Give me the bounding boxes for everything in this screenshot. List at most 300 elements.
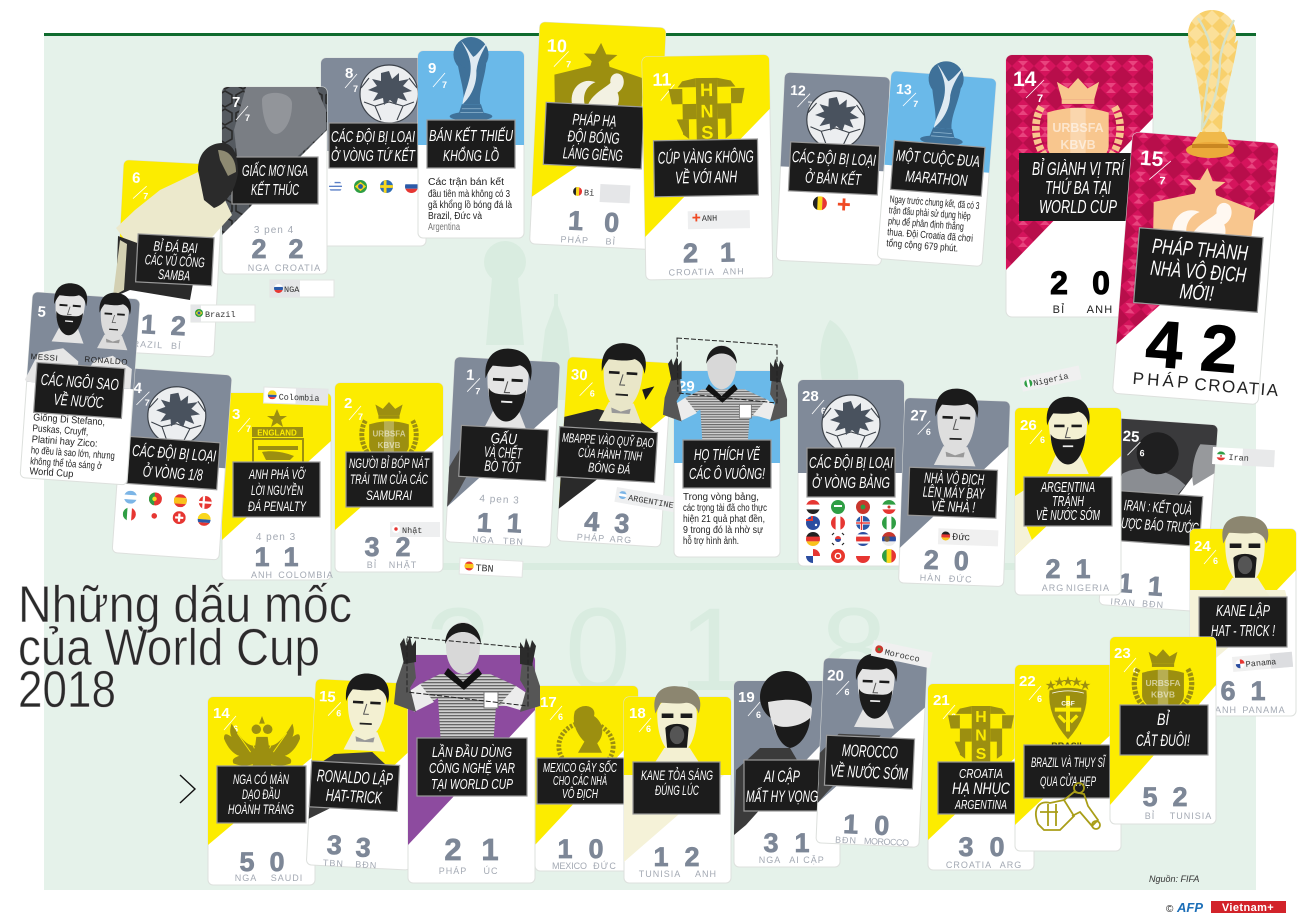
card 23/6: Belgium cuts (1110, 637, 1216, 824)
card 22/6: Brazil and Switzerland advance: QUA CỬA HẸP (1040, 772, 1096, 789)
card 5/7: stars go home: Puskas, Cruyff, (32, 423, 89, 438)
card 15/6: Ronaldo hat-trick: 15 (319, 688, 336, 706)
card 14/7: Belgium third place: THỨ BA TẠI (1045, 177, 1111, 198)
card 13/7: a marathon: trận đấu phải sử dụng hiệp (888, 204, 971, 223)
card 30/6: Mbappe: 6 (590, 388, 595, 399)
card 1/7: Russia stuns Spain: 1 (506, 508, 523, 539)
card 13/7: a marathon: MỘT CUỘC ĐUA (895, 146, 981, 171)
tag: Nigeria (1020, 366, 1082, 392)
card 26/6: Argentina avoid going home early: ARGENTINA (1040, 479, 1095, 496)
card 30/6: Mbappe: BÓNG ĐÁ (588, 459, 631, 477)
title: 2018 (18, 661, 116, 719)
card 27/6: champions fly home: ĐỨC (949, 574, 973, 584)
card 28/6: eliminated in group stage: 28 (802, 388, 819, 405)
card 20/6: Morocco goes home early: 20 (827, 667, 844, 685)
card 28/6: eliminated in group stage: Ở VÒNG BẢNG (812, 473, 890, 492)
card 9/7: semi-finals without giants: gã khổng lồ bóng đá là (428, 199, 512, 211)
card 9/7: semi-finals without giants: Brazil, Đức và (428, 211, 482, 222)
card 1/7: Russia stuns Spain: 1 (476, 507, 493, 538)
card 3/7: England breaks penalty curse: 1 (283, 542, 299, 572)
card 13/7: a marathon: Ngay trước chung kết, đã có 3 (889, 193, 980, 212)
card 29/6: referees love drawing squares: 9 trong đó là nhờ sự (683, 525, 763, 536)
card 19/6: Egypt loses hope: MẤT HY VỌNG (746, 787, 818, 806)
card 19/6: Egypt loses hope: AI CẬP (763, 767, 800, 786)
card 15/7: France new champions (1112, 132, 1298, 406)
card 30/6: Mbappe: 3 (614, 508, 630, 539)
card 1/7: Russia stuns Spain (445, 346, 560, 548)
card 14/7: Belgium third place: 2 (1050, 265, 1068, 301)
tag: Brazil (191, 305, 255, 322)
card 8/7: eliminated in quarter-finals: CÁC ĐỘI BỊ LOẠI (331, 127, 415, 146)
card 18/6: Kane on time: 6 (646, 724, 651, 734)
card 10/7: France beats neighbour: 0 (603, 207, 620, 238)
tag: Nga: NGA (284, 285, 300, 295)
card 8/7: eliminated in quarter-finals (321, 58, 426, 246)
card 1/7: Russia stuns Spain: VÀ CHẾT (484, 443, 524, 463)
card 18/6: Kane on time: TUNISIA (639, 869, 681, 879)
card 19/6: Egypt loses hope: 6 (756, 710, 761, 720)
card 9/7: semi-finals without giants: đầu tiên mà không có 3 (428, 188, 510, 200)
card 15/7: France new champions: 15 (1139, 147, 1164, 171)
card 12/7: eliminated in semi-finals: 12 (790, 82, 806, 98)
card 6/7: Belgium beats Brazil: 6 (132, 169, 141, 187)
card 10/7: France beats neighbour: BỈ (605, 235, 616, 247)
card 3/7: England breaks penalty curse: LỜI NGUYỀN (251, 482, 304, 498)
card 6/7: Belgium beats Brazil: BRAZIL (125, 338, 163, 350)
tag: Panama (1232, 652, 1293, 672)
logos (1166, 900, 1286, 915)
card 17/6: Mexico shocks champions: VÔ ĐỊCH (562, 786, 598, 801)
title (18, 576, 352, 719)
card 30/6: Mbappe: MBAPPE VÀO QUỸ ĐẠO (562, 430, 654, 450)
card 20/6: Morocco goes home early: 1 (843, 809, 859, 840)
card 6/7: Belgium beats Brazil: 1 (140, 309, 157, 340)
card 5/7: stars go home: họ đều là sao lớn, nhưng (31, 444, 115, 462)
card 29/6: referees love drawing squares: hiện 21 quả phạt đền, (683, 513, 765, 525)
card 17/6: Mexico shocks champions: ĐỨC (593, 861, 617, 871)
card 30/6: Mbappe: ARG (609, 534, 632, 545)
card 14/6: Russia opening: 5 (239, 847, 255, 877)
card 3/7: England breaks penalty curse: 4 pen 3 (256, 532, 296, 543)
card 23/6: Belgium cuts: 2 (1172, 782, 1188, 812)
card 10/7: France beats neighbour: 1 (567, 206, 584, 236)
card 17/6: Mexico shocks champions: 1 (557, 834, 573, 864)
card 3/7: England breaks penalty curse: ENGLAND (257, 428, 297, 438)
card 22/6: Brazil and Switzerland advance: BRAZIL VÀ THỤY SĨ (1031, 754, 1107, 770)
card 20/6: Morocco goes home early: VỀ NƯỚC SỚM (830, 761, 909, 784)
card 20/6: Morocco goes home early: MOROCCO (864, 836, 910, 848)
card 15/7: France new champions: CROATIA (1194, 375, 1280, 400)
title: Những dấu mốc (18, 576, 352, 634)
card 14/7: Belgium third place: ANH (1087, 304, 1113, 316)
card 7/7: Russia's dream ends: 2 (251, 234, 267, 264)
tag: Panama: Panama (1245, 657, 1277, 670)
card 8/7: eliminated in quarter-finals: Ở VÒNG TỨ KẾT (331, 146, 416, 165)
card 11/7: cup doesn't come home: 2 (683, 238, 698, 268)
tag: Colombia: Colombia (278, 393, 320, 404)
card 26/6: Argentina avoid going home early: NIGERIA (1066, 583, 1110, 593)
card 21/6: Croatia humiliates Argentina: CROATIA (946, 860, 992, 870)
card 23/6: Belgium cuts: 6 (1133, 666, 1138, 676)
card 18/6: Kane on time: 2 (684, 842, 700, 872)
card 17/6: Mexico shocks champions (535, 686, 638, 871)
card 28/6: eliminated in group stage: CÁC ĐỘI BỊ LOẠI (809, 453, 893, 472)
card 11/7: cup doesn't come home: 11 (652, 69, 672, 90)
card 11/7: cup doesn't come home: CÚP VÀNG KHÔNG (658, 147, 754, 168)
card 15/6: Ronaldo hat-trick: BĐN (355, 859, 378, 870)
tag: Morocco (871, 640, 933, 668)
card 14/6: Russia opening: 6 (233, 724, 238, 734)
card 7/7: Russia's dream ends: KẾT THÚC (251, 180, 299, 199)
card 15/7: France new champions: PHÁP THÀNH (1151, 235, 1249, 265)
card 10/7: France beats neighbour: 7 (566, 59, 571, 70)
card 1/7: Russia stuns Spain: 4 pen 3 (479, 493, 520, 507)
card 10/7: France beats neighbour: PHÁP HẠ (572, 110, 617, 131)
card 14/7: Belgium third place: 14 (1013, 68, 1037, 91)
card 27/6: champions fly home: NHÀ VÔ ĐỊCH (924, 470, 985, 489)
card 14/6: Russia opening: 14 (213, 705, 230, 722)
card 2/7: Belgium breaks hearts of Samurai: TRÁI TIM CỦA CÁC (350, 470, 429, 487)
card 15/7: France new champions: MỚI! (1179, 280, 1215, 306)
card 12/7: eliminated in semi-finals: 7 (807, 100, 813, 110)
card 13/7: a marathon: tổng cộng 679 phút. (886, 237, 959, 255)
card 18/6: Kane on time: ANH (695, 869, 717, 879)
card 1/7: Russia stuns Spain: GẤU (490, 429, 517, 448)
card 1/7: Russia stuns Spain: 7 (475, 386, 481, 396)
tag: TBN: TBN (475, 564, 494, 576)
card 13/7: a marathon: thua. Đội Croatia đã chơi (887, 227, 973, 245)
card 21/6: Croatia humiliates Argentina: HẠ NHỤC (952, 779, 1011, 798)
card 3/7: England breaks penalty curse: 7 (246, 424, 251, 434)
card 14/6: Russia opening: HOÀNH TRÁNG (228, 801, 294, 817)
card 7/7: Russia's dream ends: 7 (245, 113, 250, 123)
card 14/7: Belgium third place (1006, 55, 1153, 317)
background panel: 8 (821, 584, 887, 716)
card 12/7: eliminated in semi-finals: Ở BÁN KẾT (805, 168, 862, 189)
card 12/7: eliminated in semi-finals: CÁC ĐỘI BỊ LOẠI (792, 147, 877, 170)
card 24/6: Kane hat-trick: PANAMA (1242, 705, 1286, 715)
card 23/6: Belgium cuts: 23 (1114, 645, 1131, 662)
card 27/6: champions fly home: 27 (910, 407, 927, 425)
card 9/7: semi-finals without giants (418, 37, 524, 238)
card 16/6: VAR first use: PHÁP (439, 866, 467, 876)
card 17/6: Mexico shocks champions: MEXICO GÂY SỐC (543, 760, 617, 775)
card 29/6: referees love drawing squares: CÁC Ô VUÔNG! (689, 464, 765, 483)
card 6/7: Belgium beats Brazil: CÁC VŨ CÔNG (144, 251, 205, 270)
card 27/6: champions fly home: HÀN (920, 573, 942, 583)
card 15/7: France new champions: PHÁP (1132, 369, 1189, 392)
card 11/7: cup doesn't come home (642, 55, 773, 280)
card 18/6: Kane on time (624, 686, 731, 883)
tag: Argentine: ARGENTINE (627, 493, 674, 511)
card 2/7: Belgium breaks hearts of Samurai: 3 (364, 532, 380, 562)
card 28/6: eliminated in group stage (798, 380, 904, 566)
card 25/6: Iran: 25 (1122, 428, 1140, 446)
card 4/7: eliminated in round of 16 (112, 368, 232, 560)
card 2/7: Belgium breaks hearts of Samurai: 2 (344, 395, 352, 412)
card 30/6: Mbappe: CỦA HÀNH TINH (578, 445, 643, 464)
card 6/7: Belgium beats Brazil: 2 (170, 311, 187, 341)
card 15/6: Ronaldo hat-trick: 6 (336, 708, 342, 718)
card 9/7: semi-finals without giants: 7 (442, 80, 447, 90)
card 9/7: semi-finals without giants: Argentina (428, 222, 460, 233)
tag: Nigeria: Nigeria (1032, 372, 1069, 389)
card 9/7: semi-finals without giants: KHỔNG LỒ (443, 146, 499, 165)
card 25/6: Iran: BĐN (1142, 599, 1164, 610)
tag: Iran (1212, 447, 1275, 467)
card 5/7: stars go home: MESSI (30, 352, 59, 363)
card 21/6: Croatia humiliates Argentina: ARGENTINA (954, 797, 1007, 812)
card 4/7: eliminated in round of 16: Ở VÒNG 1/8 (142, 462, 203, 485)
card 21/6: Croatia humiliates Argentina: ARG (1000, 860, 1022, 870)
card 11/7: cup doesn't come home: 7 (671, 92, 676, 103)
card 5/7: stars go home: VỀ NƯỚC (53, 390, 104, 412)
card 2/7: Belgium breaks hearts of Samurai: 7 (358, 412, 363, 422)
card 15/7: France new champions: 7 (1159, 175, 1166, 188)
card 1/7: Russia stuns Spain: 1 (466, 367, 475, 384)
card 4/7: eliminated in round of 16: 4 (133, 380, 143, 397)
card 3/7: England breaks penalty curse (222, 393, 334, 580)
card 16/6: VAR first use: LẦN ĐẦU DÙNG (432, 744, 512, 761)
card 20/6: Morocco goes home early (816, 651, 927, 848)
card 5/7: stars go home: Platini hay Zico: (31, 434, 98, 450)
card 3/7: England breaks penalty curse: ANH (251, 570, 273, 580)
card 23/6: Belgium cuts: 5 (1142, 782, 1158, 812)
card 19/6: Egypt loses hope: NGA (759, 855, 781, 865)
card 11/7: cup doesn't come home: CROATIA (669, 267, 715, 278)
card 20/6: Morocco goes home early: BĐN (835, 835, 857, 846)
card 2/7: Belgium breaks hearts of Samurai: NGƯỜI BỈ BÓP NÁT (349, 454, 430, 471)
card 25/6: Iran: IRAN (1110, 596, 1136, 608)
card 17/6: Mexico shocks champions: MEXICO (552, 861, 588, 871)
card 4/7: eliminated in round of 16: CÁC ĐỘI BỊ LOẠI (132, 441, 217, 466)
card 12/7: eliminated in semi-finals (776, 72, 890, 265)
card 17/6: Mexico shocks champions: 6 (558, 712, 563, 722)
card 4/7: eliminated in round of 16: 7 (144, 397, 150, 408)
card 30/6: Mbappe: PHÁP (576, 532, 606, 544)
background panel: 0 (565, 584, 631, 716)
card 25/6: Iran (1099, 418, 1218, 613)
card 6/7: Belgium beats Brazil: BỈ (171, 340, 182, 351)
card 8/7: eliminated in quarter-finals: 7 (353, 84, 358, 94)
arrow (180, 775, 195, 803)
title: của World Cup (18, 619, 320, 677)
card 16/6: VAR first use: TẠI WORLD CUP (431, 776, 513, 793)
card 2/7: Belgium breaks hearts of Samurai (335, 383, 443, 572)
card 25/6: Iran: 6 (1139, 448, 1145, 458)
card 13/7: a marathon: 7 (913, 99, 919, 109)
card 29/6: referees love drawing squares: HỌ THÍCH VẼ (694, 444, 760, 464)
card 28/6: eliminated in group stage: 6 (821, 406, 826, 416)
card 17/6: Mexico shocks champions: 17 (540, 694, 557, 711)
card 11/7: cup doesn't come home: 1 (720, 237, 735, 268)
card 24/6: Kane hat-trick: ANH (1215, 705, 1237, 715)
card 25/6: Iran: 1 (1117, 568, 1134, 599)
logos: Vietnam+ (1222, 902, 1274, 914)
card 5/7: stars go home: 5 (37, 303, 47, 321)
card 15/6: Ronaldo hat-trick: 3 (355, 832, 372, 863)
card 7/7: Russia's dream ends: CROATIA (275, 263, 321, 273)
card 14/6: Russia opening: 0 (269, 847, 285, 877)
card 17/6: Mexico shocks champions: CHO CÁC NHÀ (553, 773, 607, 788)
card 14/7: Belgium third place: WORLD CUP (1039, 197, 1117, 217)
card 30/6: Mbappe: 30 (570, 366, 588, 384)
card 26/6: Argentina avoid going home early (1015, 397, 1121, 595)
card 1/7: Russia stuns Spain: BÒ TÓT (484, 458, 522, 477)
card 2/7: Belgium breaks hearts of Samurai: Nhật (402, 526, 422, 536)
logos: © (1166, 904, 1174, 915)
card 10/7: France beats neighbour: ĐỘI BÓNG (567, 126, 620, 148)
card 7/7: Russia's dream ends: 7 (232, 94, 240, 111)
card 15/6: Ronaldo hat-trick: RONALDO LẬP (316, 766, 394, 789)
tag: TBN (459, 558, 523, 577)
card 15/7: France new champions: 2 (1198, 310, 1240, 387)
card 2/7: Belgium breaks hearts of Samurai: NHẬT (389, 560, 417, 570)
card 13/7: a marathon: MARATHON (905, 168, 968, 190)
card 19/6: Egypt loses hope: 1 (794, 828, 810, 858)
gold trophy (1186, 10, 1238, 158)
card 22/6: Brazil and Switzerland advance: BRASIL (1051, 741, 1085, 751)
card 10/7: France beats neighbour (530, 22, 666, 250)
card 10/7: France beats neighbour: 10 (546, 35, 567, 56)
card 18/6: Kane on time: 18 (629, 705, 646, 722)
source: Nguồn: FIFA (1149, 874, 1199, 884)
card 7/7: Russia's dream ends: NGA (248, 263, 270, 273)
card 14/6: Russia opening: DẠO ĐẦU (242, 786, 281, 802)
tag: Morocco: Morocco (884, 648, 921, 665)
card 15/7: France new champions: NHÀ VÔ ĐỊCH (1149, 257, 1248, 287)
card 21/6: Croatia humiliates Argentina (928, 684, 1034, 870)
card 5/7: stars go home (18, 280, 141, 485)
card 19/6: Egypt loses hope: 19 (738, 689, 755, 706)
card 18/6: Kane on time: ĐÚNG LÚC (655, 782, 700, 798)
card 10/7: France beats neighbour: LÁNG GIỀNG (562, 143, 623, 165)
card 24/6: Kane hat-trick: 24 (1194, 538, 1211, 555)
card 19/6: Egypt loses hope: 3 (763, 828, 779, 858)
card 1/7: Russia stuns Spain: NGA (472, 534, 495, 545)
card 7/7: Russia's dream ends (222, 87, 327, 274)
card 24/6: Kane hat-trick: 6 (1213, 556, 1218, 566)
card 8/7: eliminated in quarter-finals: 8 (345, 65, 353, 82)
card 16/6: VAR first use: CÔNG NGHỆ VAR (429, 760, 515, 777)
card 30/6: Mbappe: 4 (584, 506, 600, 537)
card 16/6: VAR first use: ÚC (484, 866, 498, 876)
background panel: 1 (679, 584, 745, 716)
tag: Brazil: Brazil (205, 310, 236, 320)
card 23/6: Belgium cuts: BỈ (1157, 710, 1170, 729)
card 23/6: Belgium cuts: TUNISIA (1170, 811, 1212, 821)
card 18/6: Kane on time: KANE TỎA SÁNG (641, 766, 713, 783)
card 16/6: VAR first use: 1 (481, 832, 499, 867)
tag: Colombia (263, 387, 328, 405)
card 29/6: referees love drawing squares: các trọng tài đã cho thực (683, 503, 767, 514)
card 11/7: cup doesn't come home: ANH (723, 266, 745, 277)
card 25/6: Iran: IRAN : KẾT QUẢ (1123, 496, 1192, 519)
card 22/6: Brazil and Switzerland advance (1015, 665, 1121, 851)
card 3/7: England breaks penalty curse: 1 (254, 542, 270, 572)
card 27/6: champions fly home: 0 (953, 546, 969, 576)
card 26/6: Argentina avoid going home early: TRÁNH (1052, 493, 1084, 510)
card 21/6: Croatia humiliates Argentina: 21 (933, 692, 950, 709)
card 21/6: Croatia humiliates Argentina: 6 (951, 712, 956, 722)
card 22/6: Brazil and Switzerland advance: 22 (1019, 673, 1036, 690)
card 2/7: Belgium breaks hearts of Samurai: 2 (395, 532, 411, 562)
card 14/7: Belgium third place: BỈ GIÀNH VỊ TRÍ (1032, 158, 1126, 179)
card 14/7: Belgium third place: 0 (1092, 265, 1110, 301)
card 20/6: Morocco goes home early: 0 (874, 810, 890, 841)
card 25/6: Iran: 1 (1147, 571, 1164, 602)
player figure (113, 143, 238, 300)
card 5/7: stars go home: Giống Di Stefano, (33, 411, 106, 428)
card 18/6: Kane on time: 1 (653, 842, 669, 872)
card 20/6: Morocco goes home early: 6 (844, 687, 850, 697)
card 15/6: Ronaldo hat-trick: HAT-TRICK (325, 786, 383, 808)
card 9/7: semi-finals without giants: 9 (428, 60, 436, 77)
card 27/6: champions fly home: LÊN MÁY BAY (922, 484, 986, 503)
card 24/6: Kane hat-trick: 6 (1220, 676, 1236, 706)
tag: Argentine (614, 487, 676, 512)
card 3/7: England breaks penalty curse: ANH PHÁ VỠ (248, 466, 306, 482)
card 14/6: Russia opening (208, 697, 315, 885)
card 14/7: Belgium third place: 7 (1037, 93, 1043, 105)
card 23/6: Belgium cuts: CẮT ĐUÔI! (1136, 731, 1190, 750)
card 6/7: Belgium beats Brazil: 7 (143, 191, 148, 201)
card 26/6: Argentina avoid going home early: 2 (1045, 554, 1061, 584)
card 13/7: a marathon (877, 57, 997, 267)
card 14/6: Russia opening: NGA (235, 873, 257, 883)
card 2/7: Belgium breaks hearts of Samurai: SAMURAI (366, 487, 412, 503)
card 14/7: Belgium third place: BỈ (1053, 303, 1065, 316)
card 6/7: Belgium beats Brazil: SAMBA (158, 266, 190, 284)
card 5/7: stars go home: RONALDO (84, 355, 128, 367)
card 23/6: Belgium cuts: BỈ (1145, 810, 1155, 821)
card 1/7: Russia stuns Spain: TBN (503, 536, 524, 547)
tag: Iran: Iran (1228, 453, 1249, 464)
card 27/6: champions fly home: VỀ NHÀ ! (931, 498, 976, 517)
card 27/6: champions fly home (899, 387, 1010, 587)
card 10/7: France beats neighbour: Bỉ (584, 188, 594, 199)
card 24/6: Kane hat-trick (1190, 516, 1296, 716)
card 16/6: VAR first use: 2 (444, 832, 462, 867)
card 6/7: Belgium beats Brazil: BỈ ĐÁ BẠI (153, 237, 198, 256)
card 27/6: champions fly home: 2 (923, 545, 939, 575)
card 11/7: cup doesn't come home: VỀ VỚI ANH (675, 167, 738, 187)
card 19/6: Egypt loses hope: AI CẬP (789, 855, 825, 865)
logos: AFP (1176, 900, 1203, 915)
card 9/7: semi-finals without giants: Các trận bán kết (428, 176, 504, 188)
card 14/6: Russia opening: SAUDI (271, 873, 303, 883)
card 29/6: referees love drawing squares: hỗ trợ hình ảnh. (683, 534, 739, 547)
card 15/6: Ronaldo hat-trick (306, 671, 420, 872)
card 14/6: Russia opening: NGA CÓ MÀN (233, 771, 290, 787)
card 10/7: France beats neighbour: PHÁP (560, 234, 589, 246)
card 7/7: Russia's dream ends: 2 (288, 234, 304, 264)
card 5/7: stars go home: CÁC NGÔI SAO (40, 370, 119, 394)
card 13/7: a marathon: phụ để phân định thắng (888, 214, 964, 233)
card 22/6: Brazil and Switzerland advance: 6 (1037, 694, 1042, 704)
card 7/7: Russia's dream ends: 3 pen 4 (254, 225, 294, 236)
card 17/6: Mexico shocks champions: 0 (588, 834, 604, 864)
card 20/6: Morocco goes home early: MOROCCO (842, 741, 898, 762)
card 25/6: Iran: ĐƯỢC BÁO TRƯỚC (1114, 514, 1199, 537)
card 9/7: semi-finals without giants: BÁN KẾT THIẾU (429, 126, 513, 145)
card 3/7: England breaks penalty curse: COLOMBIA (278, 570, 334, 580)
card 24/6: Kane hat-trick: KANE LẬP (1216, 601, 1270, 620)
tag: Nga (270, 280, 334, 297)
card 16/6: VAR first use (394, 622, 540, 883)
background panel: 2 (425, 584, 491, 716)
card 26/6: Argentina avoid going home early: 6 (1040, 435, 1045, 445)
